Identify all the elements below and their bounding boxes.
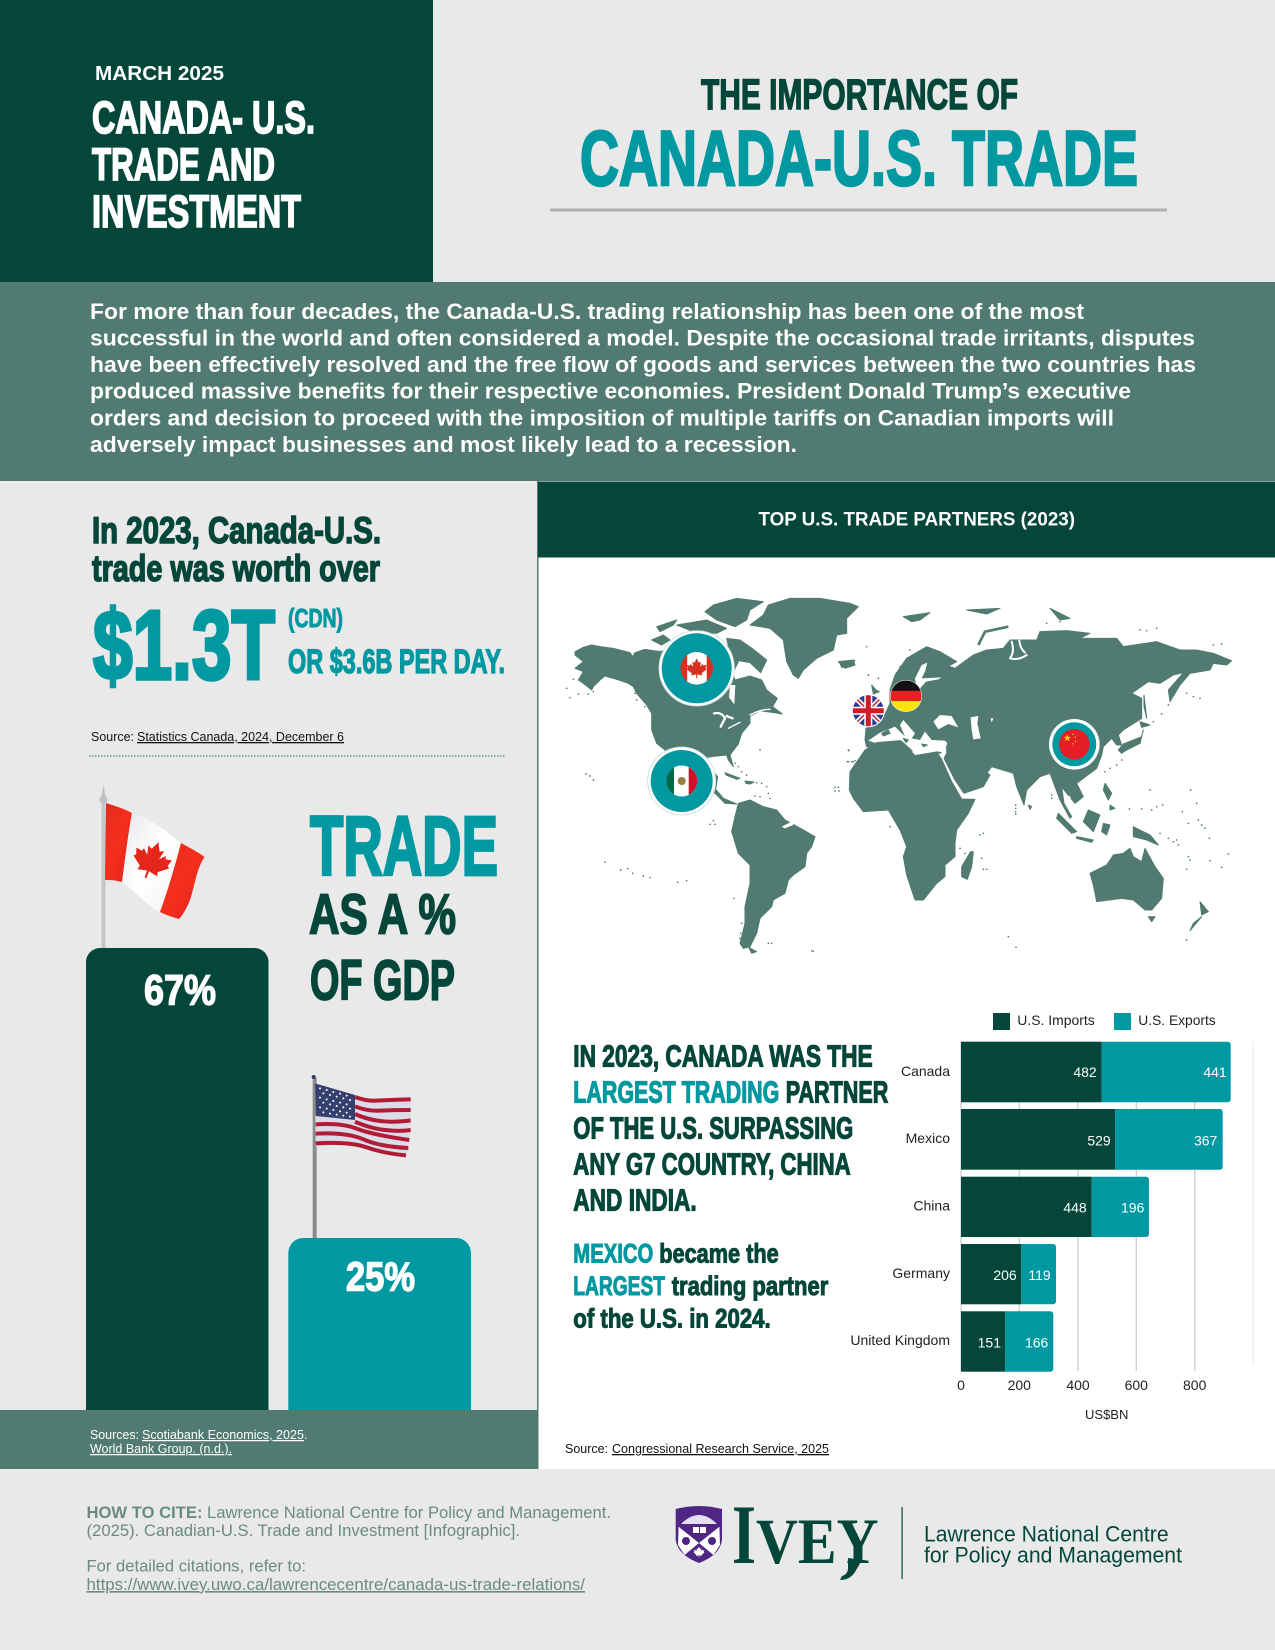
map: Greenland: [750, 598, 858, 678]
icon: Germany marker: [890, 680, 922, 712]
heading: trade worth: In 2023, Canada-U.S.: [92, 510, 381, 551]
intro paragraph: successful in the world and often considered a model. Despite the occasional trade irritants, disputes: [90, 326, 1195, 351]
panel: GDP sources band: World Bank Group. (n.d.).: [90, 1442, 232, 1456]
panel: trade value, left column: [0, 481, 537, 1410]
icon: United Kingdom marker: [852, 694, 885, 727]
heading: trade as a % of GDP: AS A %: [309, 882, 456, 946]
icon: Mexico marker: [648, 747, 716, 815]
how to cite: (2025). Canadian-U.S. Trade and Investment [Infographic].: [86, 1522, 520, 1540]
how to cite: HOW TO CITE:: [86, 1504, 202, 1522]
text block: Canada largest partner: IN 2023, CANADA WAS THE: [573, 1039, 873, 1074]
text block: Canada largest partner: OF THE U.S. SURPASSING: [573, 1110, 853, 1145]
heading: trade worth: trade was worth over: [92, 548, 380, 589]
bars: Germany: [961, 1244, 1056, 1304]
chart legend: [993, 1012, 1216, 1030]
logo centre name: Lawrence National Centre: [924, 1522, 1169, 1547]
icon: U.S. flag on pole: [312, 1075, 411, 1239]
panel: header left: [0, 0, 433, 282]
map: Asia-Pacific islands: [1028, 695, 1158, 845]
text block: Canada largest partner: PARTNER: [786, 1075, 888, 1110]
main title: [550, 71, 1167, 212]
bars: Mexico: [961, 1109, 1223, 1170]
bars: Canada: 482: [1073, 1064, 1097, 1080]
logo centre name: for Policy and Management: [924, 1543, 1182, 1568]
panel header: TOP U.S. TRADE PARTNERS (2023): [758, 510, 1075, 531]
bars: China: 196: [1121, 1199, 1145, 1215]
logo wordmark: VEY: [756, 1506, 879, 1578]
icon: Ivey shield: [676, 1506, 722, 1563]
chart category labels: [850, 1063, 950, 1348]
chart x axis: 600: [1125, 1377, 1148, 1393]
text block: Mexico largest in 2024: became the: [659, 1238, 779, 1268]
chart x axis: 800: [1183, 1377, 1207, 1393]
report title: INVESTMENT: [92, 186, 301, 237]
bars: Mexico: 367: [1194, 1132, 1218, 1148]
bar: United States 25%: 25%: [346, 1254, 415, 1300]
heading: trade as a % of GDP: [309, 799, 498, 1012]
logo: Ivey: [676, 1488, 1182, 1582]
how to cite: https://www.ivey.uwo.ca/lawrencecentre/canada-us-trade-relations/: [86, 1576, 585, 1594]
report title: TRADE AND: [92, 139, 275, 190]
chart category labels: China: [913, 1198, 950, 1214]
map: Eurasia: [865, 631, 1232, 818]
intro paragraph: For more than four decades, the Canada-U.S. trading relationship has been one of the most: [90, 299, 1085, 324]
per-day figure: [288, 603, 505, 681]
bars: Canada: 441: [1203, 1064, 1227, 1080]
map: South America: [732, 800, 815, 948]
panel: GDP sources band: Sources:: [90, 1428, 139, 1442]
bars: China: [961, 1177, 1149, 1237]
chart legend: U.S. Exports: [1138, 1012, 1216, 1028]
bar chart: U.S. imports and exports: [850, 1012, 1253, 1422]
chart x axis: [957, 1377, 1207, 1422]
report title: [92, 92, 315, 237]
icon: Canadian flag on pole: [100, 785, 204, 948]
how to cite: For detailed citations, refer to:: [86, 1558, 306, 1576]
bar: Canada 67%: 67%: [144, 966, 216, 1014]
date label: MARCH 2025: [95, 63, 224, 85]
panel: GDP sources band: .: [304, 1428, 307, 1442]
panel: introduction band: [0, 282, 1275, 481]
heading: trade as a % of GDP: TRADE: [310, 799, 498, 893]
text block: Canada largest partner: [573, 1039, 888, 1217]
main title: THE IMPORTANCE OF: [701, 71, 1018, 119]
panel: top trade partners, right column: [537, 481, 1275, 1469]
bars: United Kingdom: 166: [1025, 1334, 1049, 1350]
how to cite: Lawrence National Centre for Policy and Management.: [207, 1504, 611, 1522]
world map: [567, 598, 1232, 953]
logo wordmark: I: [732, 1488, 756, 1582]
panel header: [538, 482, 1275, 558]
text block: Mexico largest in 2024: of the U.S. in 2024.: [573, 1303, 771, 1333]
bars: Germany: 206: [993, 1267, 1017, 1283]
text block: Mexico largest in 2024: [573, 1238, 828, 1333]
intro paragraph: orders and decision to proceed with the imposition of multiple tariffs on Canadian imports will: [90, 406, 1114, 430]
chart x axis: US$BN: [1085, 1407, 1128, 1422]
bars: United Kingdom: 151: [978, 1334, 1001, 1350]
big number: $1.3T: [93, 590, 275, 700]
map: Mediterranean sea: [868, 720, 947, 756]
heading: trade as a % of GDP: OF GDP: [310, 948, 455, 1012]
map: Africa: [849, 741, 975, 900]
per-day figure: (CDN): [288, 603, 343, 633]
text block: Canada largest partner: AND INDIA.: [573, 1182, 697, 1217]
bars: China: 448: [1063, 1199, 1087, 1215]
logo centre name: [924, 1522, 1182, 1568]
bars: Canada: [961, 1042, 1231, 1102]
icon: China marker: [1049, 719, 1100, 770]
per-day figure: OR $3.6B PER DAY.: [288, 643, 505, 681]
panel: GDP sources band: [0, 1410, 537, 1469]
report title: CANADA- U.S.: [92, 92, 315, 143]
text block: Canada largest partner: LARGEST TRADING: [573, 1075, 779, 1110]
icon: Canada marker: [659, 631, 734, 706]
chart x axis: 200: [1008, 1377, 1031, 1393]
chart x axis: 0: [957, 1377, 965, 1393]
map: Eurasia, Africa and Oceania: [840, 608, 1232, 947]
source: Congressional Research Service: Source:: [565, 1441, 608, 1456]
source: Congressional Research Service: Congressional Research Service, 2025: [612, 1441, 829, 1456]
bars: Mexico: 529: [1087, 1132, 1111, 1148]
panel: GDP sources band: Scotiabank Economics, 2025: [142, 1428, 304, 1442]
chart category labels: Canada: [901, 1063, 950, 1079]
intro paragraph: produced massive benefits for their respective economies. President Donald Trump’s executive: [90, 378, 1131, 404]
text block: Canada largest partner: ANY G7 COUNTRY, CHINA: [573, 1146, 851, 1181]
logo wordmark: [732, 1488, 879, 1582]
how to cite: [86, 1504, 611, 1594]
bars: United Kingdom: [961, 1311, 1053, 1372]
intro paragraph: [90, 299, 1196, 457]
map: Americas and Greenland: [567, 598, 878, 953]
bar: United States 25%: [288, 1238, 471, 1410]
chart category labels: United Kingdom: [850, 1332, 950, 1348]
map: Australia and New Zealand: [1090, 848, 1208, 931]
bars: Germany: 119: [1028, 1267, 1051, 1283]
source: Statistics Canada: Statistics Canada, 2024, December 6: [137, 729, 344, 744]
source: Statistics Canada: Source:: [91, 729, 134, 744]
text block: Mexico largest in 2024: MEXICO: [573, 1238, 653, 1268]
chart x axis: 400: [1066, 1377, 1090, 1393]
chart category labels: Mexico: [906, 1130, 950, 1146]
map: Arctic islands: [840, 608, 1070, 667]
bar: Canada 67%: [86, 948, 268, 1410]
chart category labels: Germany: [892, 1265, 950, 1281]
heading: trade worth: [92, 510, 381, 589]
text block: Mexico largest in 2024: LARGEST: [573, 1271, 665, 1301]
intro paragraph: have been effectively resolved and the free flow of goods and services between the two countries has: [90, 352, 1196, 377]
chart legend: U.S. Imports: [1017, 1012, 1095, 1028]
text block: Mexico largest in 2024: trading partner: [672, 1271, 828, 1301]
intro paragraph: adversely impact businesses and most likely lead to a recession.: [90, 432, 797, 457]
